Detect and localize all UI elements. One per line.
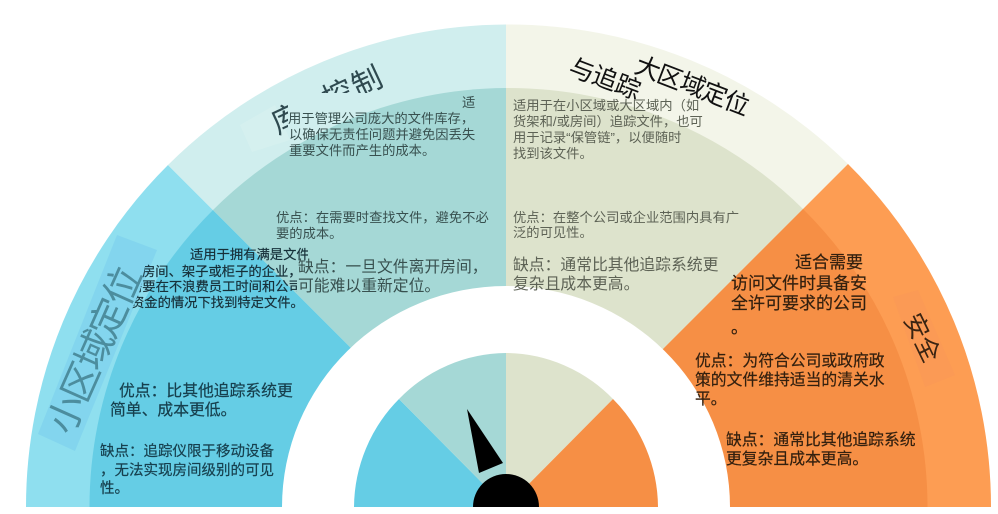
text block: small area usage: 资金的情况下找到特定文件。	[131, 295, 304, 310]
text block: wide area usage: 用于记录“保管链”，以便随时	[513, 130, 681, 145]
heading: inventory control: 制	[347, 61, 388, 104]
panel: small-area inner band	[90, 210, 510, 507]
heading: wide-area positioning and tracking: 与	[565, 53, 598, 88]
text block: small area drawback: 性。	[100, 480, 129, 497]
heading: inventory control	[272, 63, 383, 136]
heading: inventory control: 控	[318, 74, 359, 117]
panel: wide-area outer band	[506, 24, 848, 506]
text block: small area drawback: ，无法实现房间级别的可见	[100, 462, 274, 479]
text block: inventory control advantage	[276, 210, 489, 241]
heading: wide-area positioning and tracking: 大	[631, 51, 664, 86]
inner fan: inventory-control sector	[399, 353, 506, 507]
text block: wide area drawback: 缺点：通常比其他追踪系统更	[513, 256, 719, 274]
text block: security drawback: 更复杂且成本更高。	[726, 450, 868, 468]
heading: wide-area positioning and tracking: 域	[676, 68, 709, 103]
heading: wide-area positioning and tracking: 追	[588, 61, 621, 96]
text block: inventory control advantage: 优点：在需要时查找文件，避免不必	[276, 210, 489, 225]
text block: small area usage	[129, 247, 310, 310]
heading: security	[898, 309, 945, 367]
text block: security usage: 访问文件时具备安	[731, 274, 867, 293]
text block: small area advantage: 简单、成本更低。	[110, 401, 236, 419]
text block: wide area advantage: 泛的可见性。	[513, 225, 593, 240]
heading: small-area positioning: 区	[55, 357, 109, 408]
text block: wide area advantage: 优点：在整个公司或企业范围内具有广	[513, 209, 739, 225]
heading: wide-area positioning and tracking: 位	[720, 86, 753, 121]
title backing patch: security	[893, 290, 955, 387]
text block: wide area usage: 找到该文件。	[513, 146, 593, 161]
panel: inventory-control inner band	[213, 88, 506, 503]
text block: inventory control drawback: 缺点：一旦文件离开房间，	[298, 258, 488, 276]
text block: inventory control drawback	[298, 258, 488, 295]
inner fan: small area sector	[354, 399, 506, 507]
text block: inventory control drawback: 可能难以重新定位。	[298, 277, 440, 295]
text block: wide area drawback	[513, 256, 719, 293]
text block: security usage: 。	[731, 318, 748, 337]
inner fan: security sector	[506, 399, 658, 507]
gauge hub	[473, 474, 539, 507]
panel: small-area outer band	[26, 165, 510, 507]
inner fan: wide-area sector	[506, 353, 613, 507]
text block: security advantage: 优点：为符合公司或政府政	[695, 352, 885, 370]
text block: inventory control usage: 用于管理公司庞大的文件库存，	[288, 111, 474, 126]
text block: wide area drawback: 复杂且成本更高。	[513, 275, 639, 293]
text block: inventory control usage: 重要文件而产生的成本。	[289, 143, 435, 158]
text block: inventory control advantage: 要的成本。	[276, 226, 342, 241]
heading: wide-area positioning and tracking	[565, 51, 753, 121]
text block: wide area usage	[513, 98, 703, 161]
panel: inventory-control outer band	[168, 24, 506, 503]
panel: wide-area inner band	[506, 88, 803, 506]
text block: small area advantage: 优点：比其他追踪系统更	[119, 382, 293, 400]
heading: small-area positioning: 小	[41, 389, 95, 440]
heading: wide-area positioning and tracking: 踪	[611, 70, 644, 105]
text block: wide area usage: 适用于在小区域或大区域内（如	[513, 98, 699, 113]
heading: small-area positioning	[41, 261, 151, 440]
text block: small area advantage	[110, 382, 293, 419]
title backing patch: small area	[38, 235, 157, 451]
panel: security inner band	[505, 209, 928, 507]
text block: inventory control usage: 以确保无责任问题并避免因丢失	[289, 127, 475, 142]
text block: security advantage: 策的文件维持适当的清关水	[695, 371, 885, 389]
text block: security drawback: 缺点：通常比其他追踪系统	[726, 431, 916, 449]
text block: security usage: 适合需要	[795, 253, 863, 272]
text block: small area usage: 适用于拥有满是文件	[190, 247, 310, 262]
text block: inventory control usage: 适	[462, 95, 475, 110]
heading: wide-area positioning and tracking: 定	[698, 77, 731, 112]
text block: small area drawback	[100, 443, 274, 497]
text block: security drawback	[726, 431, 916, 468]
heading: small-area positioning: 域	[69, 325, 123, 376]
text block: small area usage: 房间、架子或柜子的企业，	[142, 263, 302, 279]
text block: small area drawback: 缺点：追踪仪限于移动设备	[100, 443, 274, 460]
heading: security: 全	[909, 332, 945, 367]
heading: security: 安	[898, 309, 934, 344]
heading: small-area positioning: 位	[97, 261, 151, 312]
heading: inventory control: 库	[267, 98, 308, 141]
text block: wide area advantage	[513, 209, 739, 240]
gauge needle	[467, 409, 503, 473]
heading: small-area positioning: 定	[83, 293, 137, 344]
text block: security usage: 全许可要求的公司	[731, 294, 867, 313]
text block: security usage	[731, 253, 867, 337]
white gauge gap	[282, 286, 730, 507]
title backing patch: inventory control	[240, 105, 290, 152]
text block: wide area usage: 货架和/或房间）追踪文件，也可	[513, 113, 703, 129]
text block: inventory control usage	[288, 95, 475, 158]
text block: security advantage: 平。	[695, 391, 727, 408]
panel: security outer band	[505, 164, 991, 507]
text block: security advantage	[695, 352, 885, 408]
text block: small area usage: 需要在不浪费员工时间和公司	[129, 279, 302, 294]
heading: wide-area positioning and tracking: 区	[653, 60, 686, 95]
